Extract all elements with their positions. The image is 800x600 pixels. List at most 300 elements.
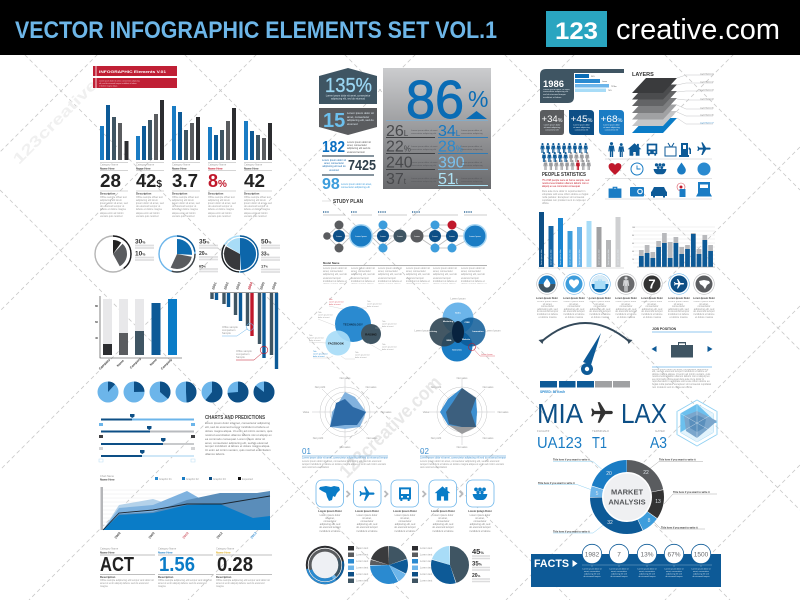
process icon row [316, 480, 494, 532]
labels [100, 162, 263, 166]
row tiny text: Lorem ipsum dolor sit amet [411, 129, 438, 132]
135% panel: 135% [325, 75, 372, 97]
labels: Title here if you want to write it [553, 458, 590, 462]
legend 1: Lorem text [356, 578, 369, 582]
centre text: ANALYSIS [608, 498, 646, 506]
descriptions [100, 192, 260, 196]
bottom stats: Category Name [216, 546, 235, 550]
radar chart 2: Net sales [498, 410, 509, 414]
venn diagram 2: Lorem Ipsum [450, 296, 466, 300]
labels: Layer Name 02 [700, 82, 715, 84]
row tiny text: consectetur adipiscing elit [411, 180, 436, 183]
labels: Category Name [172, 162, 191, 166]
callouts: Sample [236, 355, 245, 359]
logo [546, 11, 780, 47]
rotated bar labels: Lorem ipsum dolor [617, 249, 620, 265]
1986 panel: 1986 [543, 79, 564, 89]
left banner: Lorem ipsum dolor sit amet, consectetur adipiscing [99, 80, 139, 82]
fact values: 1982 [585, 552, 600, 558]
fact descriptions: amet, consectetur [666, 570, 682, 573]
callouts: comparison [222, 328, 236, 332]
title: VECTOR INFOGRAPHIC ELEMENTS SET VOL.1 [15, 17, 497, 44]
legend 1 [348, 546, 369, 583]
slider bars [99, 414, 195, 462]
axis labels [95, 304, 173, 371]
fact descriptions: amet, consectetur [584, 570, 600, 573]
flight info: FLIGHT# [537, 429, 550, 433]
fact descriptions: do eiusmod tempor [692, 575, 710, 578]
legend 1: Lorem text [356, 559, 369, 563]
radar chart 1: Net sales [340, 445, 351, 449]
captions: Lorem Ipsum Dolor [431, 509, 455, 513]
row rules [386, 138, 435, 170]
ring pie 2 [159, 236, 195, 272]
labels: Title here if you want to write it [673, 491, 710, 494]
rounded frames [316, 480, 494, 507]
big numbers: 28 [100, 171, 121, 191]
venn diagram 2: Marketing [443, 320, 454, 323]
red callout: Lorem Ipsum [481, 354, 493, 356]
callouts: Title [309, 334, 313, 337]
row tiny text: Lorem ipsum dolor sit [461, 145, 482, 148]
descriptions: Description [172, 192, 188, 196]
86% panel: 86 [406, 70, 464, 130]
axis labels: Name [116, 359, 125, 368]
left column values: 22% [386, 138, 411, 156]
leaders [538, 462, 606, 533]
labels: Layer Name 04 [700, 98, 715, 100]
year labels: 2012 [216, 531, 224, 540]
callouts: comparison [236, 352, 250, 356]
venn diagram 2: Advertising [425, 330, 438, 333]
rotated bar labels: Lorem ipsum dolor [578, 249, 581, 265]
stat list: 98 [322, 176, 340, 193]
people statistics: PEOPLE STATISTICS [542, 172, 587, 178]
icon: train [696, 182, 712, 196]
study plan [322, 199, 487, 284]
venn diagram 1: FACEBOOK [328, 342, 344, 346]
legend: Graphic 03 [213, 477, 226, 481]
descriptions: Description [100, 192, 116, 196]
flight info: A3 [650, 435, 667, 452]
icon: plane [360, 486, 374, 501]
bottom stats: Name Here [216, 550, 231, 554]
ring pie values: 50% [261, 238, 272, 246]
callouts: Title [382, 343, 386, 346]
icon: man [608, 142, 615, 157]
fact descriptions: Lorem ipsum dolor sit [609, 568, 629, 570]
fact descriptions: Lorem ipsum dolor sit [691, 568, 711, 570]
logo: creative.com [616, 14, 780, 46]
rotated bar labels: Lorem ipsum dolor [540, 249, 543, 265]
left banner: et dolore magna aliqua [99, 84, 117, 88]
icon: fuel pump [679, 143, 691, 157]
row tiny text: consectetur adipiscing [461, 164, 483, 167]
135% panel: adipiscing elit, sed do eiusmod [331, 98, 366, 100]
bar charts with big numbers: Name Here [244, 166, 259, 170]
135% panel: Lorem ipsum dolor sit amet, consectetur [326, 94, 370, 98]
fact values: 7 [617, 552, 621, 558]
ring pie values: 33% [261, 252, 270, 258]
progress bar chart [95, 296, 182, 371]
stacked bar chart right: 80 [632, 235, 634, 237]
ring pie values: 10% [135, 250, 146, 258]
charts and predictions text: CHARTS AND PREDICTIONS [205, 415, 266, 421]
icon: truck [399, 487, 411, 501]
hexagon radar [677, 400, 717, 446]
flight info: GATE# [655, 429, 665, 433]
radar chart 1: Net sales [366, 385, 377, 389]
fact values: 67% [667, 552, 681, 558]
callouts: Lorem ipsum text [313, 352, 328, 356]
radar chart 2: Net sales [483, 436, 494, 440]
labels: Category Name [244, 162, 263, 166]
captions: Lorem Ipsum Dolor [468, 509, 492, 513]
icon: car [651, 187, 667, 198]
year labels [211, 282, 278, 290]
bottom pie chart 3: 20% [472, 573, 481, 579]
badge: briefcase [592, 276, 608, 292]
radar chart 2: Net sales [457, 445, 468, 449]
node labels [336, 236, 481, 238]
captions: Lorem Ipsum Dolor [563, 297, 585, 300]
speed gauge [538, 323, 632, 394]
flight info [537, 398, 667, 452]
callouts [309, 298, 397, 359]
fact descriptions: Lorem ipsum dolor sit [637, 568, 657, 570]
year labels: 2013 [250, 531, 258, 540]
fact descriptions: adipiscing elit sed [584, 572, 600, 576]
bottom stats: Name Here [100, 550, 115, 554]
row tiny text: Lorem ipsum dolor sit amet [411, 161, 438, 164]
axes [100, 296, 182, 358]
stacked bar chart right [632, 227, 715, 267]
labels: Title here if you want to write it [659, 458, 696, 462]
radar chart 1: Net profit [313, 436, 324, 440]
section 01 text [302, 447, 388, 468]
segments [596, 466, 658, 528]
1986 panel: 30% [591, 76, 595, 78]
row tiny text: consectetur adipiscing [461, 180, 483, 183]
venn diagram 2: Lorem Ipsum [414, 328, 430, 332]
radar chart 2: Net profit [431, 436, 442, 440]
node labels: Lorem [380, 236, 386, 238]
flight info: T1 [592, 435, 607, 452]
badge: seven [644, 276, 660, 292]
stat cards: Lorem ipsum dolor [544, 124, 561, 126]
leader lines [677, 75, 713, 124]
labels [538, 458, 710, 534]
speed gauge: SPEED: 80 Km/h [540, 390, 565, 394]
labels: Category Name [208, 162, 227, 166]
radar chart 2: Net sales [483, 385, 494, 389]
flight info: MIA [537, 398, 583, 429]
axis labels: Company [98, 357, 111, 371]
captions: Lorem Ipsum Dolor [693, 297, 715, 300]
rules [100, 162, 272, 191]
node labels: Lorem [432, 236, 438, 238]
icon grid [605, 142, 712, 199]
135% panel [319, 68, 377, 104]
row tiny text: Lorem ipsum dolor sit [461, 177, 482, 180]
stat cards: sit amet adipiscing [544, 126, 560, 129]
callouts: Title [367, 300, 371, 303]
callouts: Lorem ipsum text [382, 346, 397, 348]
fact descriptions: adipiscing elit sed [666, 572, 682, 576]
segment values: 5 [596, 491, 599, 497]
expected line [103, 496, 270, 530]
captions: Lorem Ipsum Dolor [318, 509, 342, 513]
watermark text centre: 123creative.com [336, 372, 446, 483]
icon: bus [647, 144, 657, 156]
descriptions: Description [244, 192, 260, 196]
rotated bar labels [540, 249, 620, 265]
fact descriptions: amet, consectetur [639, 570, 655, 573]
stat cards: +45 % [570, 114, 593, 124]
bottom stats: Category Name [158, 546, 177, 550]
stat cards [540, 110, 624, 135]
icon: woman [618, 143, 624, 157]
ring pie values: 20% [199, 251, 208, 257]
stacked layers [632, 118, 677, 133]
captions: Lorem Ipsum Dolor [355, 509, 379, 513]
callouts: dolor sit amet [367, 305, 379, 308]
bottom stats: Category Name [100, 546, 119, 550]
callouts: Lorem ipsum text [355, 354, 370, 356]
year labels: 2002 [223, 282, 230, 290]
callouts: Lorem ipsum text [309, 336, 324, 340]
network links [327, 225, 475, 248]
venn diagram 2: Sales [455, 312, 462, 314]
15 panel [319, 108, 377, 135]
callouts [222, 324, 268, 360]
fact values: 13% [640, 552, 654, 558]
chevrons [346, 491, 462, 497]
callouts: dolor sit amet [309, 339, 321, 342]
left column values [386, 123, 413, 188]
ring pie tiny text [135, 246, 280, 272]
plot tracks [108, 299, 140, 355]
stat list: Lorem ipsum dolor sit amet, consectetur adipiscing elit [341, 183, 372, 189]
icon: north america [319, 486, 340, 501]
badge: plane [670, 276, 688, 292]
badge: heart [566, 276, 582, 292]
centre text [608, 488, 646, 506]
section 02 text [420, 447, 506, 468]
badge: seven: 7 [648, 276, 656, 292]
captions: Lorem Ipsum Dolor [536, 297, 558, 300]
model name: Model Name [323, 261, 340, 265]
row tiny text: consectetur adipiscing elit [411, 132, 436, 135]
charts and predictions text [205, 415, 273, 465]
flight info: UA123 [537, 435, 582, 452]
fact descriptions: adipiscing elit sed [693, 572, 709, 576]
legend 2: Lorem text [420, 566, 433, 570]
badge icon row [536, 274, 715, 318]
icon: heart [609, 163, 621, 175]
bars [102, 100, 270, 160]
year labels [114, 531, 258, 540]
legend 1: Lorem text [356, 572, 369, 576]
row tiny text: Lorem ipsum dolor sit [461, 161, 482, 164]
areas [103, 499, 270, 530]
1986 panel: 75 Mar [611, 86, 617, 88]
callouts: Lorem ipsum text [329, 300, 344, 304]
1986 panel: Lorem ipsum dolor sit amet, consectetur adipiscing elit sed do eiusmod tempor incididunt ut labore [543, 88, 570, 99]
ring pie values: 35% [199, 238, 210, 246]
radar chart 2: Net sales [457, 376, 468, 380]
captions: Lorem Ipsum Dolor [589, 297, 611, 300]
bottom donut chart [307, 547, 343, 583]
bottom stats: Office sample adipiscing elit tempor and dolor sit amet ut enim aliquip labore sed do eiusmod magna [158, 578, 212, 588]
row of small pies [98, 382, 274, 402]
callouts: Title [313, 350, 317, 353]
captions [318, 509, 492, 513]
people statistics: 75 of 98 people were at home sample, sed nostrud exercitation ullamco laboris nisi ut aliquip ex ea commodo consequat [542, 178, 589, 188]
icon: house [435, 486, 450, 501]
86% panel: 51t [438, 171, 459, 188]
callouts: dolor sit amet [382, 325, 394, 328]
row tiny text: consectetur adipiscing elit [411, 148, 436, 151]
segment values: 32 [607, 520, 613, 526]
venn diagram 2: Innovation [472, 330, 484, 333]
row tiny text: consectetur adipiscing elit [411, 164, 436, 167]
section 01 text: Lorem ipsum dolor sit amet, consectetur adipiscing elit sed do eiusmod tempor [302, 456, 388, 460]
stat cards: sit amet adipiscing [573, 126, 590, 129]
captions: Lorem Ipsum Dolor [615, 297, 637, 300]
layers diagram: LAYERS [632, 72, 654, 78]
fact descriptions: adipiscing elit sed [611, 572, 627, 576]
row tiny text: consectetur adipiscing [461, 132, 483, 135]
icon: briefcase [609, 187, 621, 198]
rotated bar labels: Lorem ipsum dolor [569, 249, 572, 265]
node labels: Lorem Ipsum [355, 236, 367, 238]
icon: food bowl [473, 487, 487, 500]
section 01 text: 01 [302, 447, 311, 456]
stacked bar chart right: 100 [632, 227, 635, 229]
fact descriptions: adipiscing elit sed [639, 572, 655, 576]
axis labels: Company [160, 357, 173, 371]
legend: Graphic 01 [159, 477, 172, 481]
people statistics [540, 143, 592, 207]
header bar [0, 0, 800, 55]
job position: JOB POSITION [652, 327, 677, 331]
network nodes [323, 220, 487, 252]
stat list [322, 139, 376, 193]
segment values: 20 [606, 471, 612, 477]
bars [212, 293, 272, 355]
segment values [596, 470, 661, 526]
radar chart 2: Net profit [431, 385, 442, 389]
logo: 123 [555, 18, 598, 45]
1986 panel [540, 69, 624, 103]
layers diagram [632, 72, 715, 133]
legend [100, 474, 253, 482]
left column values: 37t [386, 171, 407, 188]
callouts: dolor sit amet [382, 348, 394, 351]
fact descriptions: do eiusmod tempor [610, 575, 628, 578]
legend 2: Lorem text [420, 572, 433, 576]
legend: Expected [242, 477, 253, 481]
fact circles [582, 544, 711, 564]
callouts: dolor sit amet [329, 303, 341, 306]
year labels: 2001 [211, 282, 218, 290]
phase rules [323, 214, 487, 216]
stacked bar chart right: 20 [632, 259, 634, 261]
year labels: 2008 [114, 531, 122, 540]
rotated bar labels: Lorem ipsum dolor [550, 249, 553, 265]
fact descriptions: Lorem ipsum dolor sit [664, 568, 684, 570]
bar charts with big numbers [100, 100, 272, 218]
row tiny text: Lorem ipsum dolor sit [461, 129, 482, 132]
callouts: Lorem ipsum text [367, 302, 382, 306]
ring pie values: 17% [261, 264, 268, 268]
icon: clock [631, 163, 643, 175]
bottom stats: Name Here [158, 550, 173, 554]
rotated bar labels: Lorem ipsum dolor [598, 249, 601, 265]
venn diagram 1: RAISING [365, 332, 377, 336]
stacked bar chart right: 40 [632, 251, 634, 253]
callouts: dolor sit amet [313, 355, 325, 358]
legend 2 [412, 546, 433, 583]
facts banner: FACTS [534, 558, 569, 570]
segment values: 8 [648, 518, 651, 524]
facts banner [531, 544, 721, 587]
bottom stats: Description [100, 575, 116, 579]
ring pie 3 [222, 236, 258, 272]
section 02 text: Lorem ipsum dolor sit amet, consectetur adipiscing elit sed do eiusmod tempor [420, 456, 506, 460]
pictogram rows [543, 160, 591, 170]
86% panel: % [468, 86, 488, 112]
bottom stats: ACT [100, 554, 134, 576]
callouts: Title [355, 351, 359, 354]
callouts: dolor sit amet [318, 316, 330, 319]
big numbers: 42$ [136, 171, 162, 191]
year labels: 2005 [259, 282, 266, 290]
bar charts with big numbers: Name Here [136, 166, 151, 170]
axis labels: Name [149, 358, 158, 367]
left banner: elit, sed do eiusmod tempor incididunt ut labore [99, 82, 137, 85]
15 panel: 15 [323, 110, 345, 132]
bottom stats: Office sample adipiscing elit tempor and dolor sit amet ut enim aliquip labore sed do eiusmod magna [216, 578, 270, 588]
venn diagram 2: MBA [447, 339, 452, 342]
segment values: 13 [655, 499, 661, 505]
callouts: Sample [222, 331, 231, 335]
bottom stats: Description [216, 575, 232, 579]
legend: Graphic 02 [186, 477, 199, 481]
bottom stats [100, 546, 272, 588]
legend 1: Lorem text [356, 546, 369, 550]
centre text: MARKET [611, 488, 643, 496]
radar chart 2: Value [423, 410, 430, 414]
node labels: Lorem [414, 236, 420, 238]
stat list: 182 [322, 139, 345, 156]
descriptions: Description [136, 192, 152, 196]
86% panel: 390 [438, 154, 465, 172]
stat cards: Lorem ipsum dolor [603, 124, 620, 126]
1986 panel: Lorem [602, 81, 608, 83]
year labels: 2003 [235, 282, 242, 290]
row tiny text: consectetur adipiscing [461, 148, 483, 151]
year labels: 2004 [247, 282, 254, 290]
callouts: Lorem ipsum text [318, 314, 333, 316]
axis labels: 40 [95, 336, 99, 340]
stat cards: sit amet adipiscing [603, 126, 620, 129]
axis labels: 80 [95, 304, 99, 308]
icon: drop [677, 163, 686, 174]
year labels: 2009 [148, 531, 156, 540]
stat cards: +68 % [600, 114, 623, 124]
